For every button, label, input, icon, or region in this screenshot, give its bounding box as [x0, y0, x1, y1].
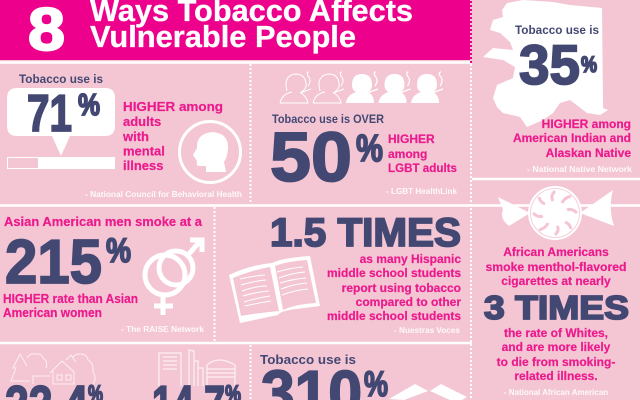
stat: 3 times: 3 TIMES	[484, 289, 629, 326]
description: mental	[123, 144, 165, 158]
icon: open box	[389, 384, 467, 400]
description continued: related illness.	[514, 369, 598, 383]
panel: LGBT adults	[270, 72, 458, 196]
description: American Indian and	[513, 131, 631, 145]
panel: Asian American men	[3, 215, 205, 334]
description: smoke menthol-flavored	[486, 260, 626, 274]
description: as many Hispanic	[360, 252, 461, 266]
stat: 35 percent: %	[581, 52, 597, 77]
description: LGBT adults	[388, 161, 457, 175]
heading: Tobacco use is OVER	[272, 114, 385, 126]
panel: Hispanic students	[229, 211, 461, 335]
source: - Nuestras Voces	[394, 326, 461, 335]
stat: 215 percent: %	[106, 232, 131, 270]
description continued: to die from smoking-	[497, 355, 615, 369]
icon: smokers	[280, 72, 443, 103]
source: - National Council for Behavioral Health	[85, 190, 242, 199]
description continued	[497, 326, 615, 383]
icon: head	[180, 122, 240, 182]
speech bubble	[7, 88, 115, 156]
description	[327, 252, 461, 323]
stat: 50 percent: 50	[270, 118, 352, 196]
stat: 71 percent: 71	[27, 85, 72, 143]
icon: rural scene	[11, 354, 95, 384]
panel: African Americans menthol	[484, 186, 629, 397]
panel: rural and urban	[5, 350, 241, 400]
description: illness	[123, 158, 163, 173]
stat: 50 percent: %	[356, 128, 383, 170]
description: HIGHER among	[123, 99, 223, 114]
icon: menthol candy	[498, 186, 614, 240]
description: among	[388, 147, 427, 161]
description: cigarettes at nearly	[501, 274, 611, 288]
heading: tobacco use is: Tobacco use is	[19, 74, 103, 86]
title banner	[0, 0, 470, 63]
description: HIGHER rate than Asian	[3, 292, 138, 306]
description	[486, 245, 626, 288]
heading: Tobacco use is	[260, 352, 356, 367]
panel: mental illness	[7, 74, 242, 199]
panel: American Indian and Alaskan Native	[483, 0, 633, 174]
description: with	[122, 129, 149, 144]
icon: city buildings	[159, 350, 235, 386]
description	[388, 132, 457, 175]
source: - LGBT HealthLink	[386, 187, 458, 196]
map: Alaska	[483, 0, 608, 127]
description continued: the rate of Whites,	[504, 326, 608, 340]
source: - National Native Network	[527, 165, 633, 174]
icon: gender symbols	[145, 239, 202, 315]
panel: low income	[260, 352, 467, 400]
description continued: and are more likely	[502, 340, 611, 354]
description: adults	[123, 114, 161, 129]
description: report using tobacco	[342, 281, 461, 295]
icon: open book	[229, 256, 320, 323]
heading: Tobacco use is	[515, 25, 599, 37]
description: compared to other	[356, 295, 461, 309]
progress bar	[7, 157, 115, 169]
description: HIGHER among	[542, 117, 631, 131]
description	[122, 99, 223, 173]
description: middle school students	[327, 266, 461, 280]
source: - The RAISE Network	[121, 325, 205, 334]
stat: 215 percent: 215	[5, 228, 102, 297]
description: middle school students	[327, 309, 461, 323]
stat: 35 percent: 35	[519, 33, 580, 96]
description	[513, 117, 631, 160]
source: - National African American	[504, 388, 608, 397]
heading: Asian American men smoke at a	[4, 215, 203, 229]
stat: 1.5 times: 1.5 TIMES	[270, 211, 461, 255]
description: American women	[3, 306, 102, 320]
stat: 71 percent: %	[78, 87, 100, 122]
description: African Americans	[503, 245, 609, 259]
description: HIGHER	[388, 132, 435, 146]
description: Alaskan Native	[546, 146, 631, 160]
stat: 50 percent	[270, 118, 383, 196]
title banner: Vulnerable People	[90, 19, 356, 54]
description	[3, 292, 138, 320]
